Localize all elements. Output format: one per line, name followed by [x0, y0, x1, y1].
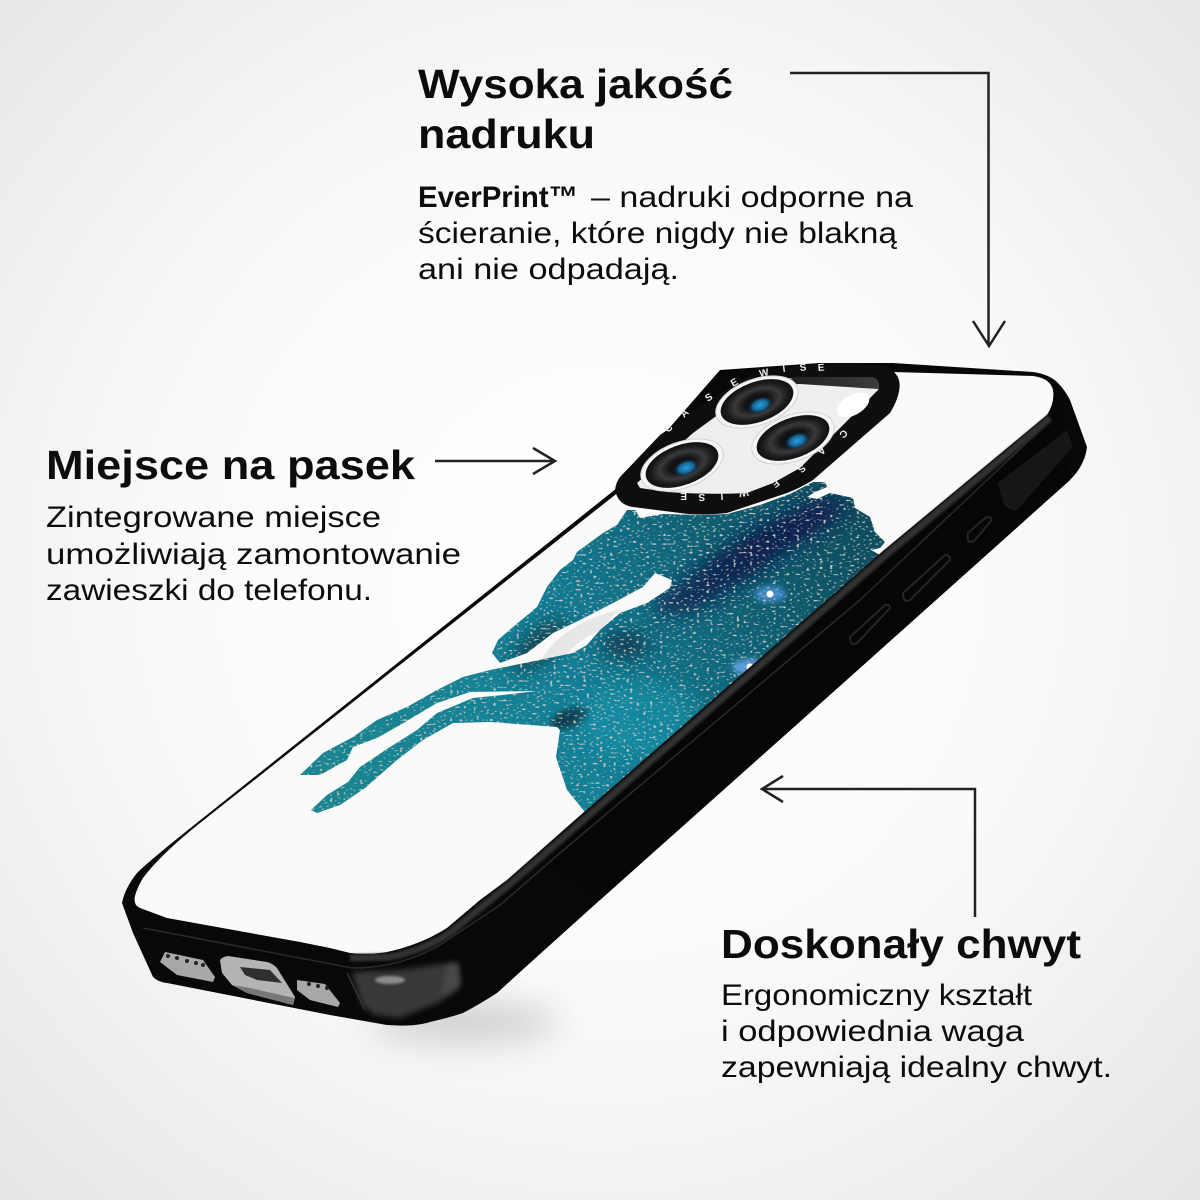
- charging port: [220, 956, 295, 1005]
- corner seam: [347, 973, 365, 1010]
- bottom speaker left: [160, 952, 215, 982]
- camera frame: [615, 363, 900, 514]
- arrow: print quality: [790, 73, 1005, 346]
- camera window: [637, 378, 879, 494]
- window highlight: [832, 387, 874, 423]
- body text: i odpowiednia waga: [721, 1015, 1024, 1048]
- body text: [418, 181, 913, 286]
- camera ring text: CASE: [769, 427, 849, 490]
- phone case: [122, 363, 1087, 1026]
- body text: – nadruki odporne na: [591, 181, 913, 214]
- callout: grip: [721, 921, 1112, 1084]
- heading: Wysoka jakość: [418, 61, 733, 107]
- camera ring text: [663, 362, 849, 502]
- back panel: [135, 372, 1053, 954]
- phone shadow: [370, 1004, 560, 1040]
- heading: [418, 61, 733, 157]
- side band: [540, 400, 1070, 900]
- side buttons: [850, 517, 991, 644]
- body text: umożliwiają zamontowanie: [46, 538, 461, 571]
- camera bump: [615, 362, 900, 514]
- heading: Miejsce na pasek: [46, 442, 415, 488]
- body text: [721, 979, 1112, 1084]
- body text: zawieszki do telefonu.: [46, 574, 372, 607]
- bottom speaker right: [297, 980, 340, 1007]
- callout: print quality: [418, 61, 913, 286]
- camera ring text: WISE: [680, 486, 749, 502]
- body text: ani nie odpadają.: [418, 253, 679, 286]
- callout: strap slot: [46, 442, 461, 607]
- side gloss: [352, 962, 460, 1018]
- lens left: [634, 429, 730, 501]
- body text: EverPrint™: [418, 181, 578, 214]
- lens right: [745, 402, 841, 474]
- body text: [46, 501, 461, 607]
- body text: ścieranie, które nigdy nie blakną: [418, 217, 897, 250]
- band groove: [143, 430, 1040, 968]
- lens top: [709, 366, 805, 438]
- arrow: strap slot: [435, 448, 555, 474]
- horse galaxy print: [300, 482, 885, 813]
- camera ring text: CASE: [663, 377, 741, 435]
- gloss highlight: [375, 976, 405, 984]
- arrow: grip: [762, 776, 975, 917]
- gloss highlight right: [441, 963, 460, 996]
- body text: Ergonomiczny kształt: [721, 979, 1033, 1012]
- body text: zapewniają idealny chwyt.: [721, 1051, 1112, 1084]
- heading: nadruku: [418, 111, 595, 157]
- body text: Zintegrowane miejsce: [46, 501, 381, 534]
- band rim: [350, 418, 1050, 958]
- magsafe ring: [540, 610, 618, 662]
- case body: [122, 363, 1087, 1026]
- camera ring text: WISE: [758, 362, 825, 380]
- heading: Doskonały chwyt: [721, 921, 1081, 967]
- mute switch: [998, 430, 1073, 510]
- window inner wall: [770, 377, 879, 389]
